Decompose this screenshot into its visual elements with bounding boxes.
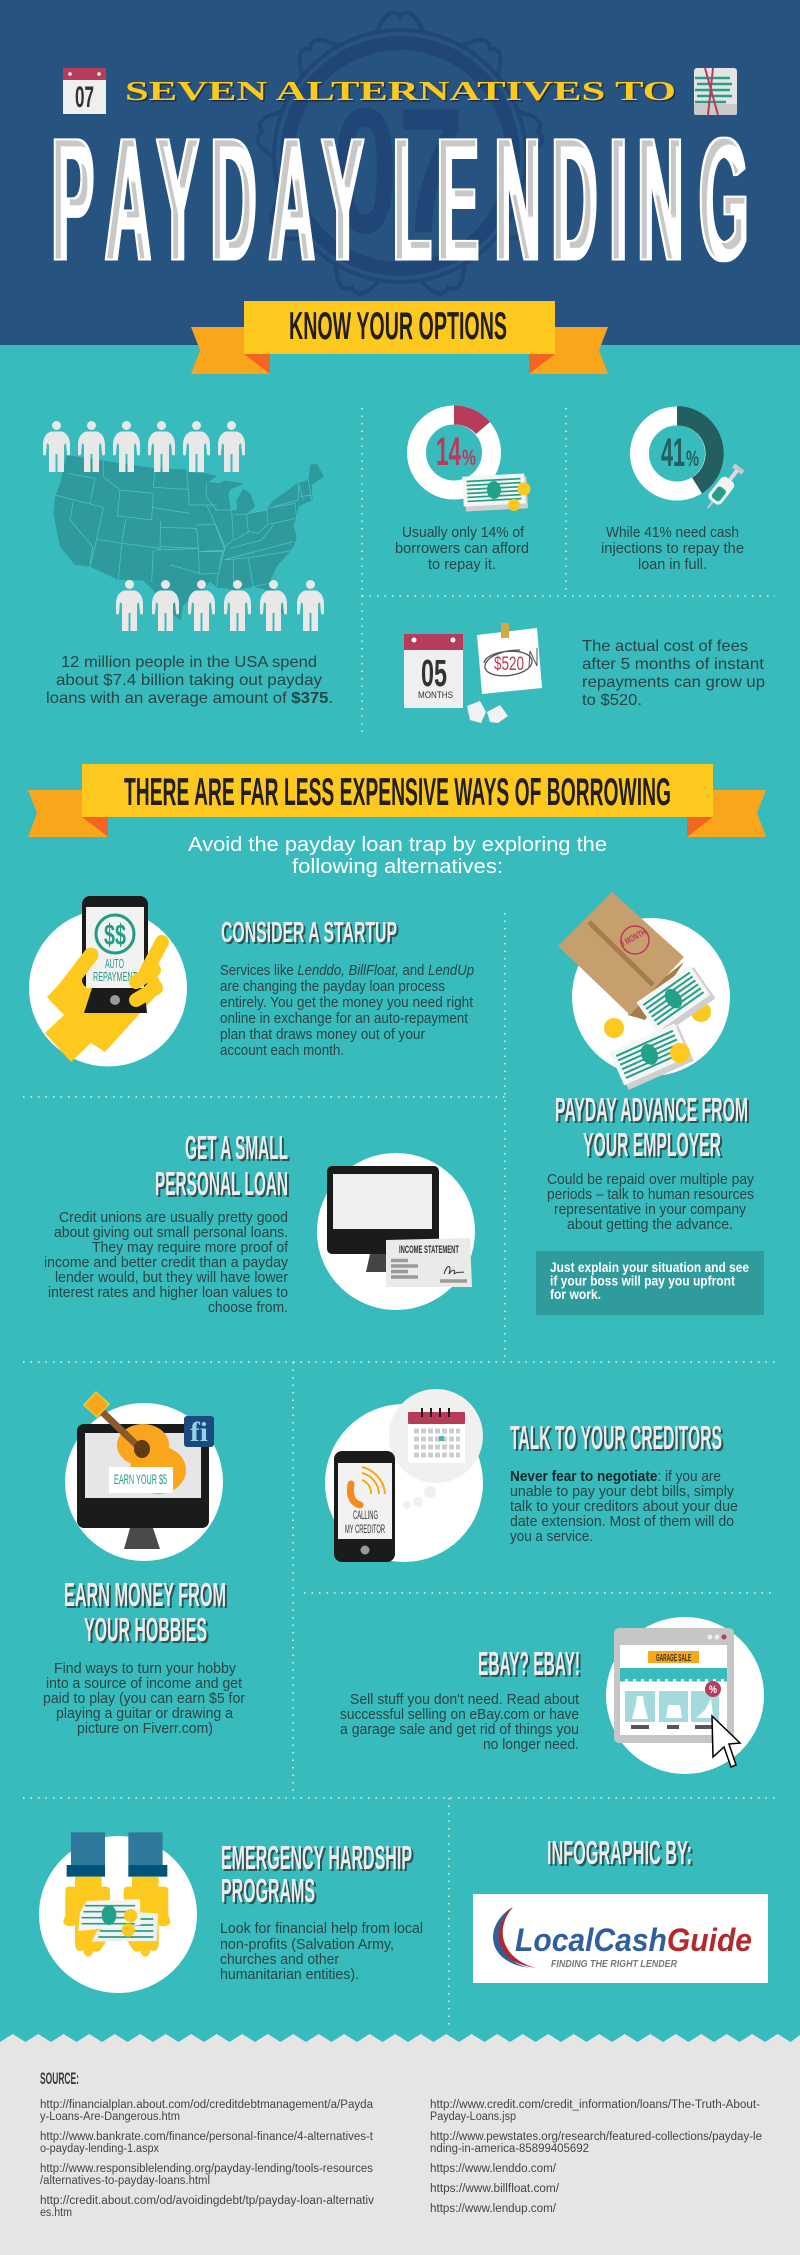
body text: no longer need. <box>483 1737 579 1753</box>
donut chart: 41% <box>640 406 724 494</box>
sources right column: https://www.lenddo.com/ <box>430 2163 557 2175</box>
body text: Look for financial help from local <box>220 1921 423 1937</box>
icon: envelope with money <box>558 892 730 1091</box>
icon: guitar on monitor: EARN YOUR $5 <box>114 1471 167 1487</box>
heading: CONSIDER A STARTUP <box>221 917 397 949</box>
header band <box>0 0 800 345</box>
icon: phone in hand: AUTO <box>105 956 124 971</box>
body text: Never fear to negotiate: if you are <box>510 1469 721 1485</box>
sources left column: http://credit.about.com/od/avoidingdebt/tp/payday-loan-alternativ <box>40 2195 374 2207</box>
icon: online shop with cursor <box>606 1617 764 1774</box>
body text: you a service. <box>510 1529 593 1545</box>
panel: ebay: EBAY? EBAY! <box>478 1645 580 1682</box>
body text: Credit unions are usually pretty good <box>59 1210 288 1226</box>
ribbon: know your options <box>191 301 608 374</box>
map of USA <box>53 455 324 621</box>
heading <box>155 1129 288 1202</box>
sources: SOURCE: <box>40 2069 79 2088</box>
icon: monitor with income statement: INCOME STATEMENT <box>399 1244 459 1256</box>
panel: emergency hardship programs: EMERGENCY HARDSHIP <box>221 1839 412 1876</box>
panel: earn money from hobbies <box>43 1392 245 1737</box>
sources left column: es.htm <box>40 2207 72 2219</box>
sources left column: y-Loans-Are-Dangerous.htm <box>40 2111 180 2123</box>
body text: churches and other <box>220 1952 339 1968</box>
icons: people bottom row <box>116 580 324 631</box>
icon: envelope with money: 3 MONTH <box>618 927 648 949</box>
body text: successful selling on eBay.com or have <box>340 1707 579 1723</box>
text: 14 percent: Usually only 14% of <box>402 525 525 541</box>
body text <box>220 1921 423 1983</box>
icon: phone in hand: $$ <box>104 919 126 952</box>
sources left column: http://www.responsiblelending.org/payday-lending/tools-resources <box>40 2163 373 2175</box>
subtitle: SEVEN ALTERNATIVES TO <box>125 76 676 106</box>
text: 14 percent: to repay it. <box>428 557 496 573</box>
sources left column: o-payday-lending-1.aspx <box>40 2143 159 2155</box>
body text <box>43 1661 245 1737</box>
watermark emblem 07 <box>255 13 545 299</box>
icon: phone in hand: REPAYMENT <box>93 969 137 984</box>
panel: talk to your creditors <box>325 1389 738 1562</box>
sources right column <box>430 2099 762 2215</box>
icon: calendar 05 months: 05 <box>421 653 447 695</box>
callout <box>536 1251 764 1315</box>
body text: are changing the payday loan process <box>220 979 445 995</box>
sources left column: /alternatives-to-payday-loans.html <box>40 2175 210 2187</box>
body text: Sell stuff you don't need. Read about <box>350 1692 579 1708</box>
panel: earn money from hobbies: EARN MONEY FROM <box>64 1576 226 1613</box>
icon: phone and thought bubble: CALLING <box>353 1508 378 1522</box>
body text: interest rates and higher loan values to <box>48 1285 288 1301</box>
body text: Could be repaid over multiple pay <box>547 1172 755 1188</box>
body text: They may require more proof of <box>92 1240 289 1256</box>
icon: phone and thought bubble: MY CREDITOR <box>345 1522 385 1536</box>
body text: date extension. Most of them will do <box>510 1514 734 1530</box>
text: actual cost of fees: repayments can grow up <box>582 674 765 691</box>
text: 14 percent: borrowers can afford <box>395 541 529 557</box>
text: actual cost of fees: The actual cost of fees <box>582 638 748 655</box>
body text: a garage sale and get rid of things you <box>340 1722 579 1738</box>
icon: calendar 07: 07 <box>75 81 94 114</box>
panel: ebay <box>340 1617 764 1774</box>
heading: YOUR HOBBIES <box>84 1611 207 1648</box>
body text: periods – talk to human resources <box>547 1187 754 1203</box>
text: 41 percent: While 41% need cash <box>606 525 739 541</box>
sources left column: http://www.bankrate.com/finance/personal-finance/4-alternatives-t <box>40 2131 374 2143</box>
donut chart: 41%: % <box>686 446 699 471</box>
heading <box>221 1839 412 1909</box>
body text: non-profits (Salvation Army, <box>220 1937 394 1953</box>
icon: note with 520 dollars: $520 <box>494 654 524 675</box>
body text: picture on Fiverr.com) <box>77 1721 213 1737</box>
sources right column: http://www.credit.com/credit_information/loans/The-Truth-About- <box>430 2099 760 2111</box>
dotted dividers: stats <box>362 408 775 732</box>
icon: money and coins <box>462 473 530 512</box>
icon: calendar 05 months <box>404 634 463 708</box>
text: 41 percent: loan in full. <box>638 557 707 573</box>
intro text <box>188 834 607 878</box>
body text: about getting the advance. <box>567 1217 733 1233</box>
sources right column: nding-in-america-85899405692 <box>430 2143 589 2155</box>
icon: phone in hand <box>29 896 187 1066</box>
panel: small personal loan <box>44 1129 475 1316</box>
text: 12 million people: about $7.4 billion taking out payday <box>56 672 322 689</box>
text: actual cost of fees: after 5 months of instant <box>582 656 765 673</box>
body text: online in exchange for an auto-repayment <box>220 1011 468 1027</box>
icon: crumpled paper <box>467 701 508 723</box>
body text <box>44 1210 289 1316</box>
footer background with zigzag edge <box>0 2034 800 2255</box>
heading: PROGRAMS <box>221 1872 315 1909</box>
title: PAYDAY LENDING <box>51 102 748 299</box>
text: 41 percent: injections to repay the <box>601 541 744 557</box>
sources right column: https://www.billfloat.com/ <box>430 2183 560 2195</box>
body text <box>340 1692 579 1753</box>
icons: people top row <box>43 421 245 472</box>
icon: syringe <box>701 462 746 513</box>
intro text: following alternatives: <box>292 856 503 878</box>
body text <box>547 1172 755 1233</box>
body text: representative in your company <box>554 1202 747 1218</box>
callout: Just explain your situation and see <box>550 1260 749 1275</box>
donut chart: 14%: 14 <box>436 430 461 474</box>
icon: bundle of money <box>694 68 737 115</box>
logo: local cash guide: FINDING THE RIGHT LENDER <box>551 1959 678 1970</box>
panel: payday advance from employer <box>536 892 764 1315</box>
panel: small personal loan: PERSONAL LOAN <box>155 1165 288 1202</box>
body text: unable to pay your debt bills, simply <box>510 1484 735 1500</box>
sources left column <box>40 2099 374 2219</box>
body text: talk to your creditors about your due <box>510 1499 738 1515</box>
ribbon: know your options: KNOW YOUR OPTIONS <box>289 305 507 348</box>
body text <box>220 963 474 1059</box>
icon: online shop with cursor: GARAGE SALE <box>656 1653 691 1664</box>
callout: if your boss will pay you upfront <box>550 1274 735 1288</box>
icon: calendar 07 <box>63 68 106 114</box>
ribbon: far less expensive ways <box>28 764 766 837</box>
sources right column: Payday-Loans.jsp <box>430 2111 516 2123</box>
body text: Services like Lenddo, BillFloat, and LendUp <box>220 963 474 979</box>
icon: online shop with cursor: % <box>709 1684 717 1696</box>
panel: emergency hardship programs <box>39 1832 423 1993</box>
intro text: Avoid the payday loan trap by exploring the <box>188 834 607 856</box>
donut chart: 14% <box>416 405 492 490</box>
dotted dividers: alternatives <box>23 913 775 2028</box>
text: 12 million people: loans with an average amount of $375. <box>46 690 333 707</box>
sources right column: http://www.pewstates.org/research/featured-collections/payday-le <box>430 2131 762 2143</box>
text: 41 percent <box>601 525 744 573</box>
text: 12 million people: 12 million people in the USA spend <box>61 654 317 671</box>
body text: about giving out small personal loans. <box>54 1225 288 1241</box>
panel: infographic by <box>473 1834 768 1983</box>
heading <box>64 1576 226 1648</box>
text: 12 million people <box>46 654 333 707</box>
body text: into a source of income and get <box>46 1676 242 1692</box>
icon: monitor with income statement <box>317 1153 475 1310</box>
icon: calendar 05 months: MONTHS <box>418 690 453 701</box>
logo: local cash guide <box>473 1894 768 1983</box>
icon: hands holding money <box>39 1832 197 1993</box>
sources <box>40 2069 762 2219</box>
body text: entirely. You get the money you need right <box>220 995 473 1011</box>
body text: playing a guitar or drawing a <box>56 1706 234 1722</box>
body text: income and better credit than a payday <box>44 1255 289 1271</box>
donut chart: 41%: 41 <box>661 431 685 475</box>
body text: choose from. <box>208 1300 288 1316</box>
icon: guitar on monitor <box>65 1392 223 1561</box>
watermark emblem 07: 07 <box>332 71 464 270</box>
icon: guitar on monitor: fi <box>190 1417 209 1447</box>
text: 14 percent <box>395 525 529 573</box>
icon: note with 520 dollars <box>477 623 542 694</box>
icon: phone and thought bubble <box>325 1389 483 1562</box>
text: actual cost of fees: to $520. <box>582 692 642 709</box>
logo: local cash guide: LocalCashGuide <box>515 1922 752 1958</box>
body text: humanitarian entities). <box>220 1967 359 1983</box>
body text <box>510 1469 738 1545</box>
callout: for work. <box>550 1287 601 1302</box>
panel: consider a startup <box>29 896 474 1066</box>
body text: Find ways to turn your hobby <box>54 1661 237 1677</box>
body text: account each month. <box>220 1043 344 1059</box>
sources right column: https://www.lendup.com/ <box>430 2203 557 2215</box>
body text: lender would, but they will have lower <box>55 1270 288 1286</box>
sources left column: http://financialplan.about.com/od/creditdebtmanagement/a/Payda <box>40 2099 374 2111</box>
heading <box>555 1091 748 1163</box>
body text: paid to play (you can earn $5 for <box>43 1691 245 1707</box>
body text: plan that draws money out of your <box>220 1027 425 1043</box>
donut chart: 14%: % <box>462 445 476 470</box>
panel: small personal loan: GET A SMALL <box>185 1129 288 1166</box>
text: actual cost of fees <box>582 638 765 709</box>
